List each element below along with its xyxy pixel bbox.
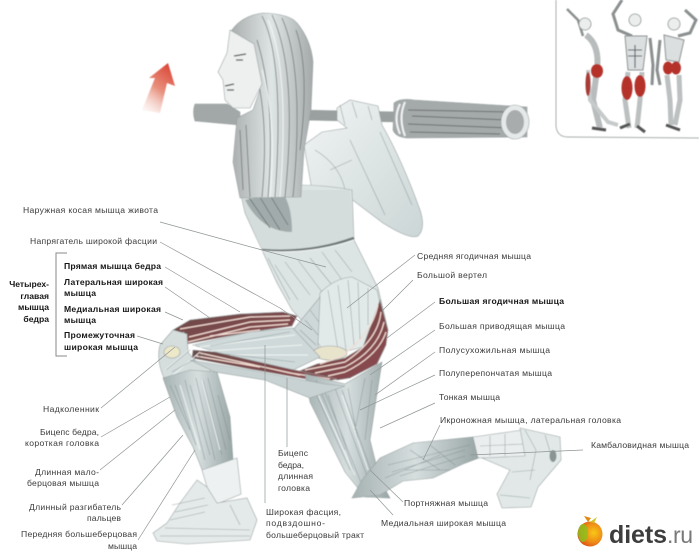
labels: left column: Передняя большеберцовая [21, 529, 137, 539]
labels: centre column [266, 448, 364, 540]
labels: left column: широкая мышца [64, 342, 138, 352]
labels: right column: Большая приводящая мышца [439, 321, 565, 331]
labels: right column: Средняя ягодичная мышца [417, 251, 531, 261]
labels: centre column: Широкая фасция, [266, 507, 341, 517]
leader lines [100, 222, 583, 540]
panel frame [556, 0, 699, 138]
labels: centre column: подвздошно- [266, 518, 325, 528]
front lower leg [163, 370, 233, 472]
gluteus maximus (red) [297, 300, 388, 380]
labels: right column: Большая ягодичная мышца [439, 296, 564, 306]
labels: left column: Напрягатель широкой фасции [30, 236, 157, 246]
labels: left column: Наружная косая мышца живота [23, 205, 158, 215]
logo text: diets [609, 521, 667, 549]
icon: apple [578, 516, 602, 546]
figure: front view [613, 0, 653, 132]
labels: left column: мышца [64, 315, 96, 325]
front sock and shoe [153, 458, 257, 544]
hair [230, 13, 313, 198]
rear sock and shoe [473, 428, 561, 508]
labels: left column: Латеральная широкая [64, 277, 163, 287]
labels: centre column: бедра, [278, 460, 304, 470]
labels: left column: Медиальная широкая [64, 304, 161, 314]
torso and tank top [240, 185, 388, 350]
rear calf [352, 437, 479, 498]
labels: right column: Полусухожильная мышца [439, 345, 550, 355]
labels: right column: Медиальная широкая мышца [381, 518, 506, 528]
labels: right column: Икроножная мышца, латеральная головка [440, 415, 621, 425]
gluteus medius and hip [293, 277, 381, 360]
front knee [159, 330, 215, 384]
labels: quadriceps group title: бедра [23, 314, 49, 324]
figure: rear view [657, 10, 696, 130]
figure: side view [567, 9, 618, 130]
labels: right column [381, 251, 689, 528]
logo: diets.ru: .ru [667, 522, 693, 548]
figure: woman doing barbell lunge [153, 13, 561, 544]
labels: quadriceps group title [9, 279, 49, 324]
hamstring lower thigh (red) [192, 350, 337, 382]
lower thigh underside [190, 360, 345, 398]
labels: centre column: Бицепс [278, 448, 309, 458]
labels: right column: Полуперепончатая мышца [439, 368, 552, 378]
labels: centre column: большеберцовый тракт [266, 530, 364, 540]
panel: small figures with highlighted muscles [556, 0, 699, 138]
labels: centre column: головка [278, 483, 310, 493]
labels: left column: мышца [108, 541, 137, 551]
labels: right column: Тонкая мышца [439, 392, 500, 402]
raised arm and hand [304, 100, 423, 237]
labels: quadriceps group title: Четырех- [9, 279, 49, 289]
labels: left column: пальцев [87, 513, 121, 523]
rear thigh [305, 362, 390, 498]
labels: right column: Большой вертел [417, 270, 487, 280]
labels: left column: Промежуточная [64, 330, 135, 340]
labels: quadriceps group title: главая [20, 291, 49, 301]
rectus femoris / upper thigh (red) [173, 312, 297, 344]
labels: left column [21, 205, 163, 551]
barbell [194, 99, 529, 139]
bracket: quadriceps group [56, 253, 67, 356]
labels: quadriceps group title: мышца [18, 302, 49, 312]
face [218, 30, 262, 108]
labels: centre column: длинная [278, 471, 313, 481]
arrow: upward motion [142, 63, 175, 113]
labels: left column: короткая головка [25, 438, 99, 448]
labels: right column: Камбаловидная мышца [591, 440, 689, 450]
labels: right column: Портняжная мышца [404, 498, 488, 508]
logo: diets.ru [578, 516, 693, 549]
labels: left column: Длинный разгибатель [29, 502, 122, 512]
labels: left column: Длинная мало- [35, 467, 99, 477]
fascia lata mid thigh [193, 328, 320, 370]
labels: left column: Прямая мышца бедра [64, 261, 161, 271]
labels: left column: Бицепс бедра, [40, 427, 99, 437]
labels: left column: берцовая мышца [27, 478, 99, 488]
labels: left column: мышца [64, 288, 96, 298]
labels: left column: Надколенник [43, 404, 99, 414]
